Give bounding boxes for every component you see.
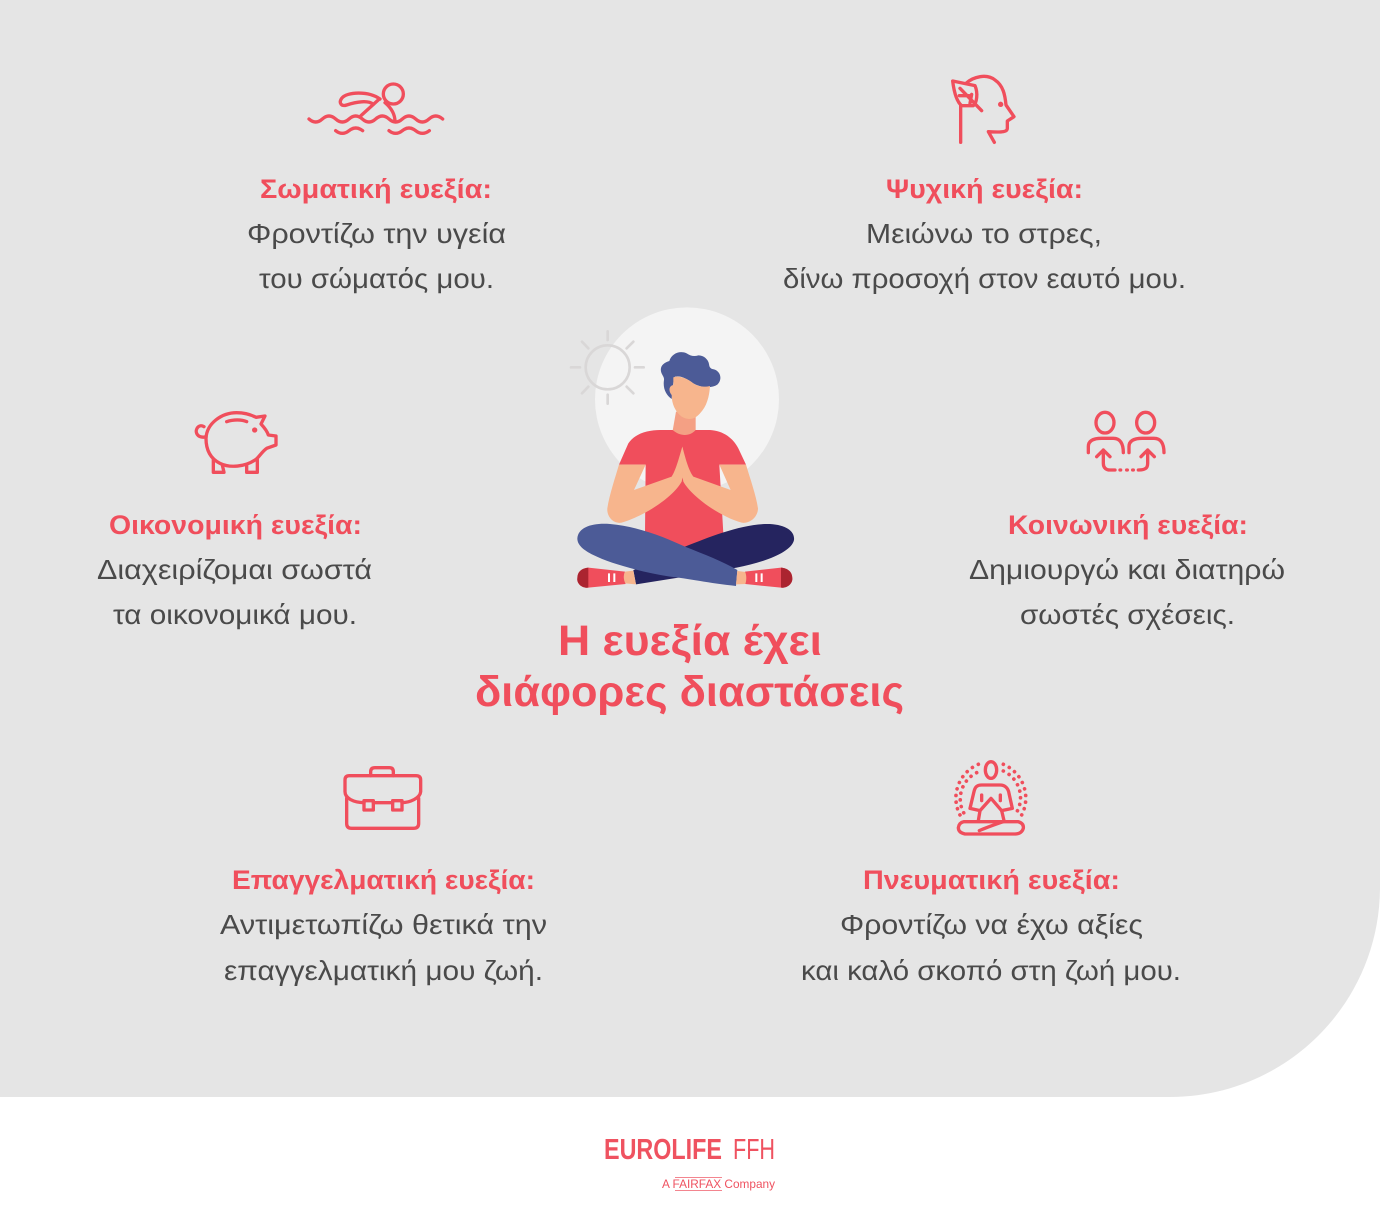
title: Η ευεξία έχει (558, 617, 822, 665)
face (669, 377, 710, 419)
right leg (633, 524, 794, 584)
text block: επαγγελματική μου ζωή. (224, 955, 543, 986)
panel: spiritual wellness (801, 762, 1181, 986)
illustration: meditating person (571, 307, 794, 588)
heading: Ψυχική ευεξία: (886, 174, 1083, 204)
logo: Eurolife FFH: FFH (733, 1134, 775, 1166)
icon: head with leaf (953, 76, 1014, 142)
left leg (577, 524, 737, 586)
heading: Κοινωνική ευεξία: (1008, 510, 1248, 540)
panel: physical wellness (247, 84, 506, 294)
icon: meditation figure (956, 762, 1026, 834)
neck (673, 412, 696, 435)
text block: του σώματός μου. (259, 263, 494, 294)
icon: two people with arrows (1088, 412, 1164, 470)
icon: briefcase (345, 768, 421, 828)
left arm (607, 447, 684, 523)
right arm (682, 447, 758, 523)
left foot and shoe (577, 568, 636, 588)
pale circle (595, 307, 779, 491)
title (475, 617, 904, 716)
logo: Eurolife FFH: EUROLIFE (604, 1134, 722, 1166)
text block (220, 909, 547, 986)
text block: δίνω προσοχή στον εαυτό μου. (783, 263, 1186, 294)
text block (247, 218, 506, 294)
text block: Δημιουργώ και διατηρώ (969, 554, 1285, 585)
text block (97, 554, 372, 630)
text block: και καλό σκοπό στη ζωή μου. (801, 955, 1181, 986)
icon: sun (571, 331, 644, 404)
panel: financial wellness (97, 413, 372, 630)
heading: Επαγγελματική ευεξία: (232, 865, 535, 895)
text block: Διαχειρίζομαι σωστά (97, 554, 372, 585)
icon: swimmer (309, 84, 443, 133)
text block (969, 554, 1285, 630)
text block: Αντιμετωπίζω θετικά την (220, 909, 547, 940)
hair (661, 352, 720, 399)
heading: Σωματική ευεξία: (260, 174, 492, 204)
logo: Eurolife FFH: A FAIRFAX Company (662, 1177, 775, 1191)
text block: Μειώνω το στρες, (866, 218, 1102, 249)
icon: piggy bank (196, 413, 276, 472)
right foot and shoe (736, 568, 792, 588)
heading: Οικονομική ευεξία: (109, 510, 362, 540)
text block (783, 218, 1186, 294)
logo: Eurolife FFH (604, 1134, 775, 1191)
title: διάφορες διαστάσεις (475, 668, 904, 716)
panel: professional wellness (220, 768, 547, 986)
text block (801, 909, 1181, 986)
text block: Φροντίζω την υγεία (247, 218, 506, 249)
heading: Πνευματική ευεξία: (863, 865, 1120, 895)
text block: τα οικονομικά μου. (113, 599, 357, 630)
panel: social wellness (969, 412, 1285, 630)
text block: σωστές σχέσεις. (1020, 599, 1235, 630)
shirt (619, 430, 746, 548)
panel: mental wellness (783, 76, 1186, 294)
text block: Φροντίζω να έχω αξίες (840, 909, 1143, 940)
